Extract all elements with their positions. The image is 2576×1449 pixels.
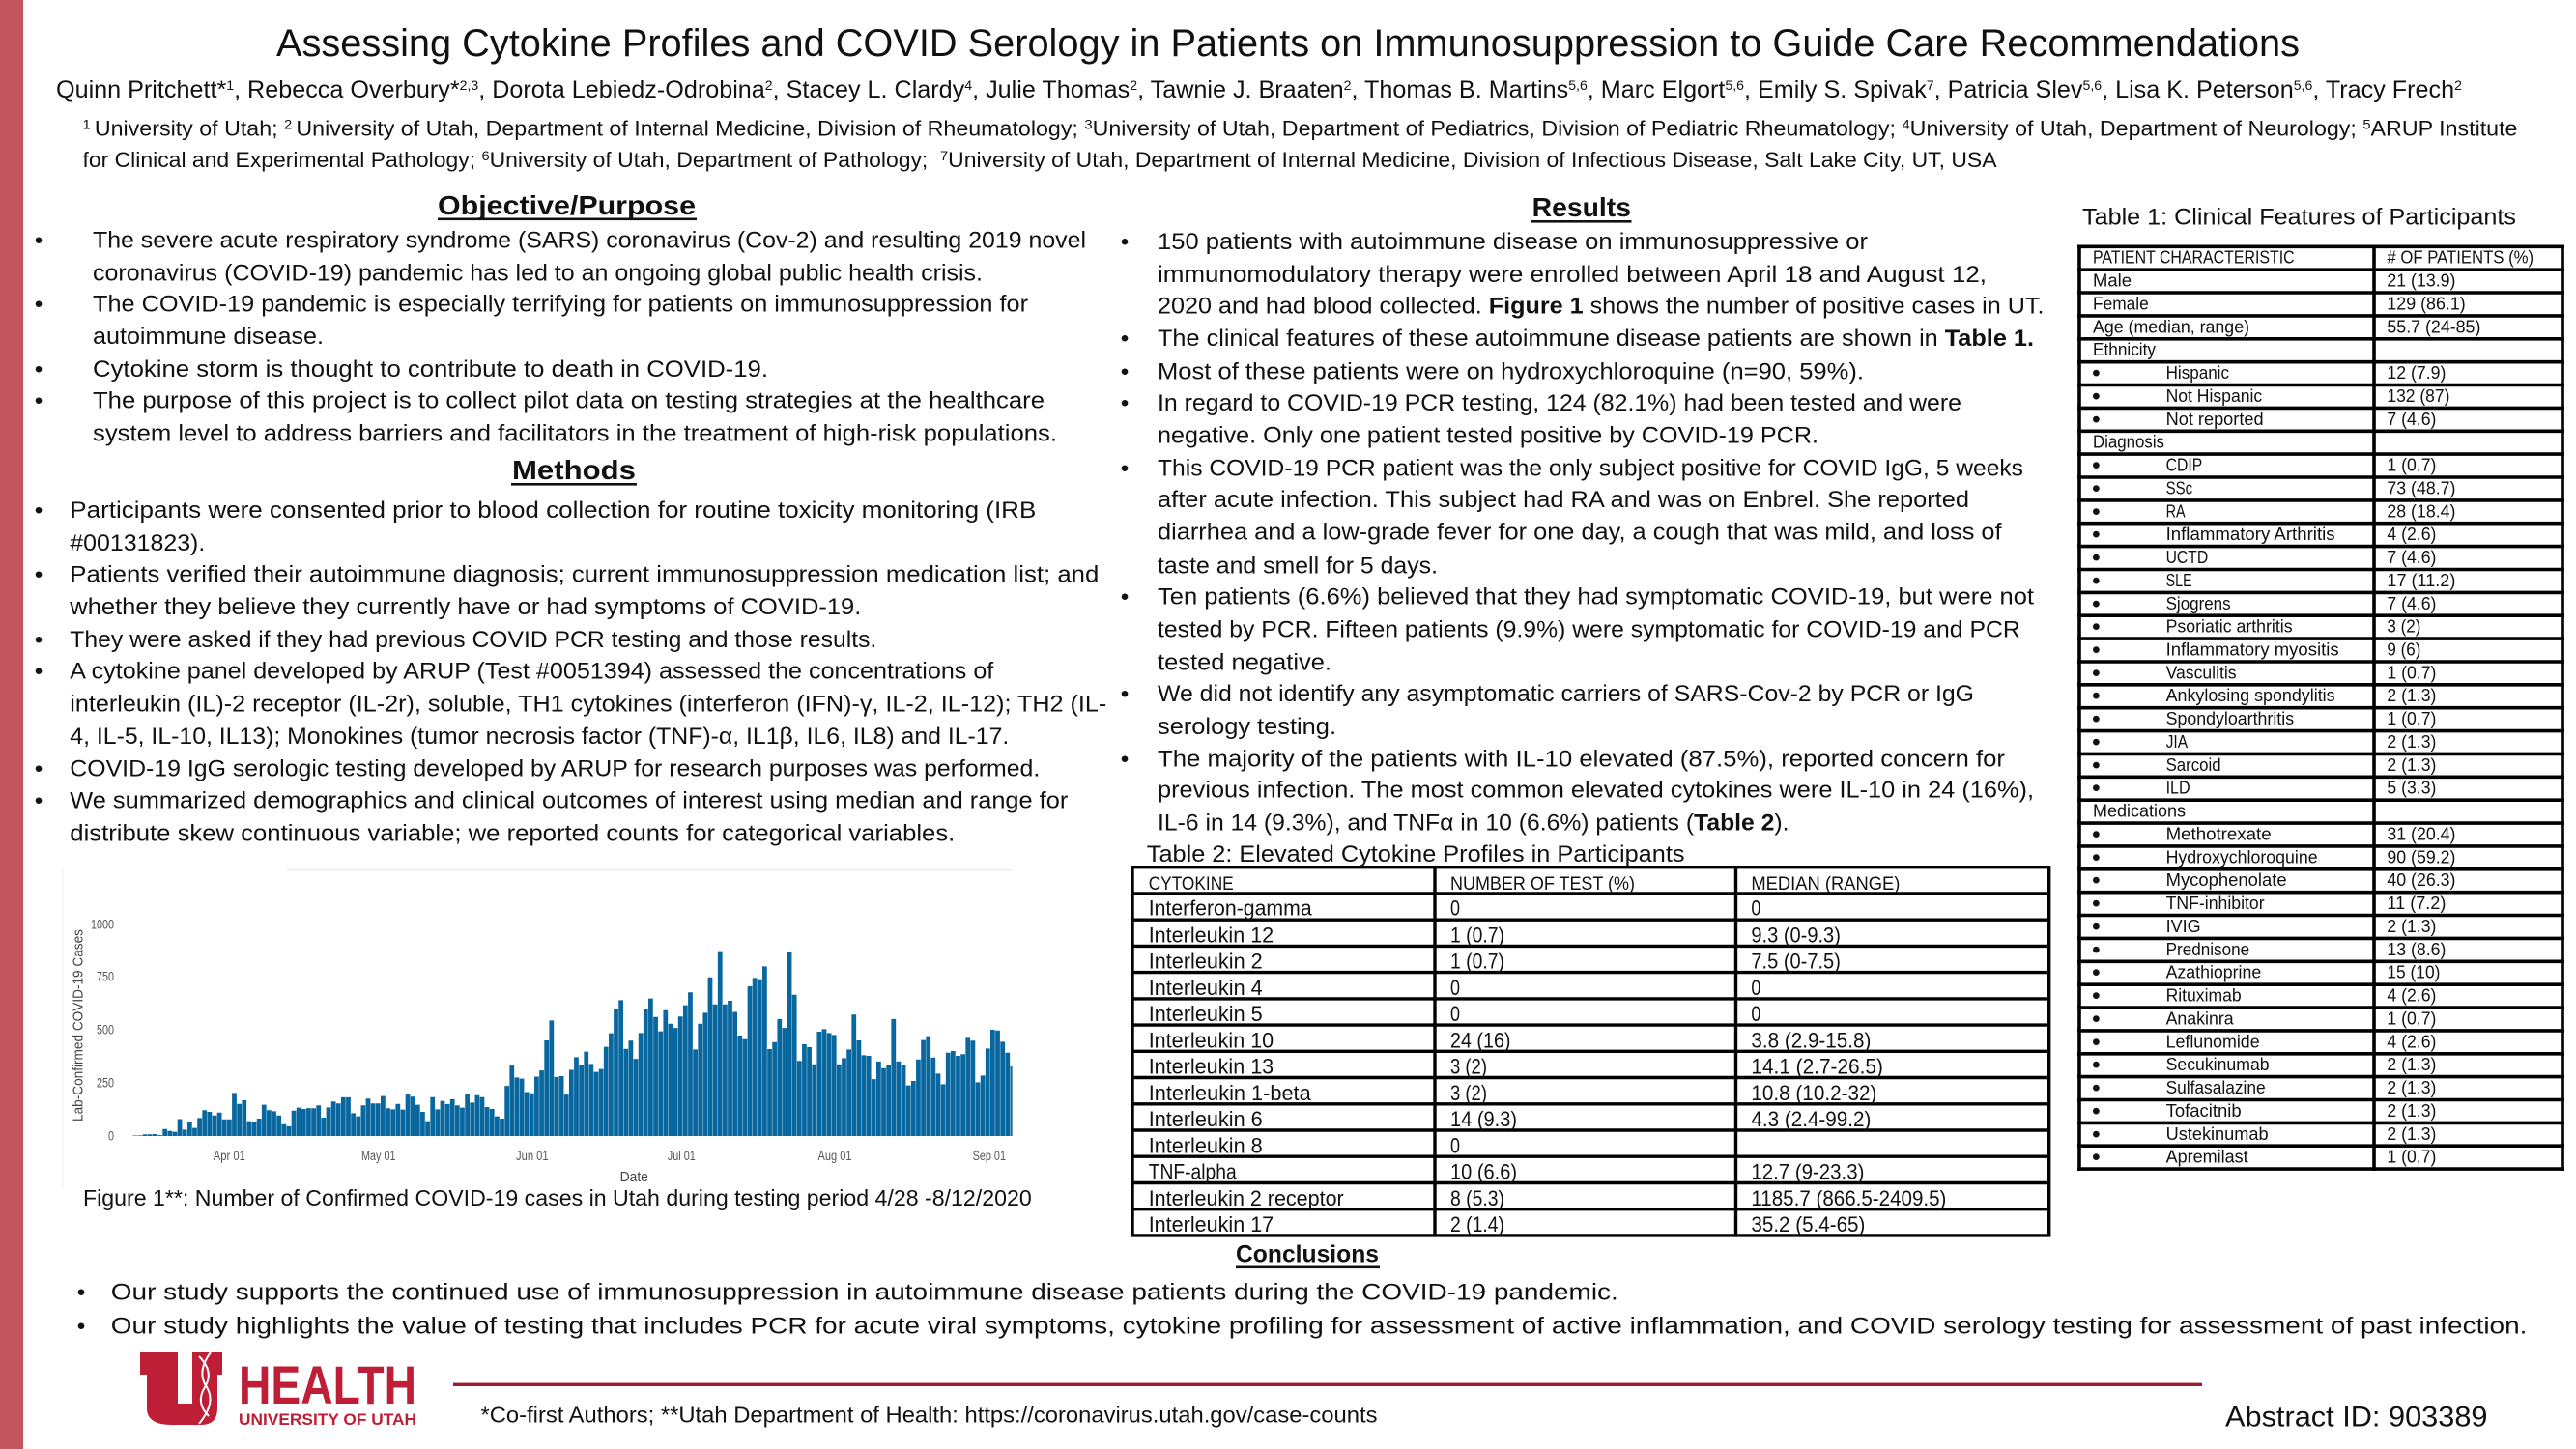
table 1 diagnosis rows: 9 (6): [2387, 639, 2420, 659]
results bullets: The clinical features of these autoimmune disease patients are shown in Table 1.: [1158, 326, 2034, 352]
table 1 medication rows: 4 (2.6): [2387, 1031, 2436, 1051]
table 1 diagnosis rows: •: [2092, 637, 2101, 664]
table 1 diagnosis rows: SLE: [2166, 570, 2192, 590]
table 2 rows: Interleukin 4: [1149, 976, 1263, 1000]
table 1 medication rows: •: [2092, 1074, 2101, 1101]
table 1 ethnicity rows: [2092, 339, 2449, 433]
affiliations: 1: [83, 117, 95, 132]
results bullets: In regard to COVID-19 PCR testing, 124 (82.1%) had been tested and were: [1158, 390, 1961, 416]
results bullets: tested negative.: [1158, 649, 1331, 675]
table 2 rows: 0: [1751, 1002, 1760, 1026]
table 2 rows: 0: [1450, 976, 1460, 1000]
affiliations: [83, 117, 2518, 172]
methods bullets: •: [35, 562, 43, 588]
table 1 diagnosis rows: •: [2092, 567, 2101, 594]
table 2 rows: 3 (2): [1450, 1081, 1487, 1105]
table 2 rows: 7.5 (0-7.5): [1751, 950, 1841, 974]
y axis labels: [91, 918, 114, 1144]
table 1 diagnosis rows: 2 (1.3): [2387, 754, 2436, 775]
results bullets: •: [1121, 746, 1129, 772]
results bullets: serology testing.: [1158, 714, 1336, 740]
results bullets: Most of these patients were on hydroxychloroquine (n=90, 59%).: [1158, 359, 1864, 385]
table 1 medication rows: Prednisone: [2166, 939, 2249, 959]
table 1 medication rows: •: [2092, 891, 2101, 918]
table 1 medication rows: 4 (2.6): [2387, 985, 2436, 1005]
authors: , Tawnie J. Braaten: [1137, 76, 1344, 103]
authors: , Emily S. Spivak: [1744, 76, 1927, 103]
results bullets: The majority of the patients with IL-10 elevated (87.5%), reported concern for: [1158, 746, 2005, 772]
results bullets: •: [1121, 229, 1129, 255]
table 1 ethnicity rows: 132 (87): [2387, 385, 2449, 406]
table 2 rows: 0: [1450, 1133, 1460, 1157]
objective bullets: The purpose of this project is to collect pilot data on testing strategies at the healthcare: [93, 388, 1045, 414]
panel: methods: [35, 455, 1106, 847]
y axis labels: 1000: [91, 918, 114, 931]
table 1 medication rows: Apremilast: [2166, 1147, 2248, 1167]
table 2 rows: 0: [1450, 1002, 1460, 1026]
logo wordmark: HEALTH: [239, 1354, 416, 1415]
table 2 rows: MEDIAN (RANGE): [1751, 874, 1900, 895]
table 1 diagnosis rows: 4 (2.6): [2387, 524, 2436, 544]
table 1 diagnosis rows: 7 (4.6): [2387, 547, 2436, 567]
conclusion bullets: •: [77, 1314, 85, 1339]
results bullets: 2020 and had blood collected. Figure 1 shows the number of positive cases in UT.: [1158, 293, 2045, 319]
conclusion bullets: Our study highlights the value of testing that includes PCR for acute viral symptoms, cytokine profiling for assessment of active inflammation, and COVID serology testing for assessment of past infection.: [111, 1314, 2527, 1339]
table 2 rows: Interleukin 17: [1149, 1212, 1274, 1236]
table 1 diagnosis rows: RA: [2166, 500, 2186, 521]
x axis labels: [214, 1149, 1006, 1163]
abstract id: Abstract ID: 903389: [2225, 1402, 2487, 1434]
panel: conclusions: [77, 1241, 2527, 1339]
objective bullets: autoimmune disease.: [93, 324, 324, 350]
table 2 rows: 0: [1450, 896, 1460, 920]
affiliations: 3: [1084, 117, 1093, 132]
table 2 rows: 9.3 (0-9.3): [1751, 923, 1841, 947]
table 1 diagnosis rows: Spondyloarthritis: [2166, 708, 2294, 728]
table 1 medication rows: 2 (1.3): [2387, 916, 2436, 936]
methods bullets: distribute skew continuous variable; we reported counts for categorical variables.: [70, 821, 955, 847]
table 2 rows: TNF-alpha: [1149, 1159, 1237, 1184]
affiliations: University of Utah;: [95, 117, 284, 141]
table 2 rows: Interleukin 8: [1149, 1133, 1263, 1157]
table 2 rows: 0: [1751, 976, 1760, 1000]
results bullets: [1121, 229, 2045, 836]
methods bullets: Participants were consented prior to blood collection for routine toxicity monitoring (IRB: [70, 497, 1036, 524]
table 1 diagnosis rows: •: [2092, 775, 2101, 802]
heading: methods: Methods: [512, 455, 636, 485]
table 2 rows: 8 (5.3): [1450, 1186, 1504, 1210]
table 1 diagnosis rows: •: [2092, 706, 2101, 733]
table 2 rows: 1 (0.7): [1450, 923, 1504, 947]
authors: Quinn Pritchett*: [56, 76, 225, 103]
table 2 rows: Interleukin 2: [1149, 950, 1263, 974]
table 1 medication rows: Tofacitnib: [2166, 1100, 2242, 1121]
table 1 diagnosis rows: •: [2092, 660, 2101, 687]
logo: University of Utah Health: [140, 1352, 416, 1429]
table 2 rows: 12.7 (9-23.3): [1751, 1159, 1864, 1184]
table 2 rows: 14 (9.3): [1450, 1107, 1517, 1131]
x axis labels: Jun 01: [516, 1149, 549, 1163]
results bullets: 150 patients with autoimmune disease on immunosuppressive or: [1158, 229, 1868, 255]
x axis labels: Sep 01: [973, 1149, 1006, 1163]
affiliations: University of Utah, Department of Internal Medicine, Division of Infectious Disease, Salt Lake City, UT, USA: [948, 148, 1997, 172]
table 1 medication rows: Methotrexate: [2166, 823, 2272, 844]
affiliations: 2: [284, 117, 296, 132]
authors: , Patricia Slev: [1934, 76, 2083, 103]
objective bullets: •: [35, 388, 43, 414]
table 2 rows: 10 (6.6): [1450, 1159, 1517, 1184]
table 1 medication rows: •: [2092, 913, 2101, 940]
table 1 ethnicity rows: 12 (7.9): [2387, 362, 2446, 383]
table 1 diagnosis rows: 28 (18.4): [2387, 500, 2455, 521]
table 1 medication rows: Hydroxychloroquine: [2166, 846, 2318, 867]
table 1 medication rows: IVIG: [2166, 916, 2201, 936]
table 2 rows: 0: [1751, 896, 1760, 920]
objective bullets: system level to address barriers and facilitators in the treatment of high-risk populations.: [93, 421, 1057, 447]
footnote: *Co-first Authors; **Utah Department of Health: https://coronavirus.utah.gov/case-counts: [481, 1403, 1378, 1428]
table 1 medication rows: •: [2092, 1052, 2101, 1079]
table 2 rows: 4.3 (2.4-99.2): [1751, 1107, 1871, 1131]
objective bullets: •: [35, 292, 43, 318]
methods bullets: Patients verified their autoimmune diagnosis; current immunosuppression medication list; and: [70, 562, 1099, 588]
methods bullets: •: [35, 659, 43, 685]
table 1 diagnosis rows: •: [2092, 752, 2101, 779]
authors: , Lisa K. Peterson: [2102, 76, 2294, 103]
authors: , Stacey L. Clardy: [773, 76, 965, 103]
table 1 ethnicity rows: •: [2092, 406, 2101, 433]
affiliations: 5: [2362, 117, 2371, 132]
table 1 diagnosis rows: 2 (1.3): [2387, 731, 2436, 752]
authors: 2: [1130, 77, 1137, 93]
left accent bar: [0, 0, 23, 1449]
table 1 diagnosis rows: •: [2092, 613, 2101, 640]
table 1 characteristic and demographic rows: PATIENT CHARACTERISTIC: [2093, 247, 2295, 268]
table 1 medication rows: Mycophenolate: [2166, 869, 2287, 890]
table 2 rows: 1 (0.7): [1450, 950, 1504, 974]
methods bullets: 4, IL-5, IL-10, IL13); Monokines (tumor necrosis factor (TNF)-α, IL1β, IL6, IL8) and IL-17.: [70, 724, 1009, 750]
table 1 ethnicity rows: •: [2092, 383, 2101, 410]
table 1 diagnosis rows: ILD: [2166, 778, 2190, 798]
table 2 rows: 3 (2): [1450, 1055, 1487, 1079]
table 1 medication rows: •: [2092, 1121, 2101, 1148]
authors: 2: [1344, 77, 1352, 93]
objective bullets: The severe acute respiratory syndrome (SARS) coronavirus (Cov-2) and resulting 2019 novel: [93, 228, 1086, 254]
table 2 rows: 3.8 (2.9-15.8): [1751, 1028, 1871, 1052]
table 1 medication rows: Secukinumab: [2166, 1054, 2270, 1074]
affiliations: University of Utah, Department of Neurology;: [1910, 117, 2362, 141]
table 2 rows: 1185.7 (866.5-2409.5): [1751, 1186, 1946, 1210]
table 2 rows: Interferon-gamma: [1149, 896, 1312, 920]
objective bullets: [35, 228, 1086, 447]
objective bullets: •: [35, 228, 43, 254]
table 2 rows: Interleukin 6: [1149, 1107, 1263, 1131]
table 1 diagnosis rows: 1 (0.7): [2387, 662, 2436, 682]
methods bullets: #00131823).: [70, 530, 205, 556]
table 1 diagnosis rows: Diagnosis: [2093, 432, 2164, 452]
table 2 rows: 35.2 (5.4-65): [1751, 1212, 1865, 1236]
y axis labels: 500: [97, 1022, 114, 1037]
table 1 medication rows: 31 (20.4): [2387, 823, 2455, 844]
affiliations: 7: [940, 148, 948, 163]
table 1 medication rows: 90 (59.2): [2387, 846, 2455, 867]
table 1 medication rows: Leflunomide: [2166, 1031, 2260, 1051]
table 1 characteristic and demographic rows: Age (median, range): [2093, 316, 2249, 336]
logo subtitle: UNIVERSITY OF UTAH: [239, 1410, 416, 1429]
table 1 diagnosis rows: •: [2092, 498, 2101, 526]
authors: 7: [1927, 77, 1934, 93]
y axis labels: 750: [97, 970, 114, 983]
authors: 2: [765, 77, 773, 93]
table 1 diagnosis rows: CDIP: [2166, 454, 2202, 475]
x axis title: Date: [620, 1170, 648, 1185]
table 1 medication rows: Ustekinumab: [2166, 1123, 2269, 1144]
table 1 medication rows: 11 (7.2): [2387, 893, 2446, 913]
table 1 medication rows: 2 (1.3): [2387, 1123, 2436, 1144]
table 1 ethnicity rows: Ethnicity: [2093, 339, 2157, 359]
table 1 characteristic and demographic rows: 55.7 (24-85): [2387, 316, 2480, 336]
results bullets: negative. Only one patient tested positive by COVID-19 PCR.: [1158, 422, 1818, 448]
table 1 medication rows: Sulfasalazine: [2166, 1077, 2266, 1097]
panel: results: [1121, 192, 2045, 836]
methods bullets: •: [35, 755, 43, 781]
table 1 diagnosis rows: Inflammatory myositis: [2166, 639, 2339, 659]
table 1 diagnosis rows: 17 (11.2): [2387, 570, 2455, 590]
results bullets: •: [1121, 390, 1129, 416]
bars: [135, 952, 1013, 1136]
table 1 characteristic and demographic rows: 21 (13.9): [2387, 270, 2455, 291]
table 1 ethnicity rows: •: [2092, 359, 2101, 386]
table 1 medication rows: •: [2092, 821, 2101, 848]
heading: results: Results: [1532, 192, 1631, 222]
authors: 5,6: [2083, 77, 2102, 93]
table 1 characteristic and demographic rows: 129 (86.1): [2387, 293, 2466, 313]
authors: 2,3: [460, 77, 478, 93]
table 1 ethnicity rows: 7 (4.6): [2387, 409, 2436, 429]
table 1 diagnosis rows: •: [2092, 545, 2101, 572]
table 1 medication rows: 2 (1.3): [2387, 1077, 2436, 1097]
methods bullets: A cytokine panel developed by ARUP (Test #0051394) assessed the concentrations of: [70, 659, 993, 685]
panel: objective/purpose: [35, 190, 1086, 447]
authors: 4: [964, 77, 972, 93]
table 1 diagnosis rows: UCTD: [2166, 547, 2208, 567]
methods bullets: •: [35, 627, 43, 653]
methods bullets: •: [35, 497, 43, 524]
table 2 rows: Interleukin 1-beta: [1149, 1081, 1311, 1105]
table 2 rows: 2 (1.4): [1450, 1212, 1504, 1236]
methods bullets: [35, 497, 1106, 847]
table 1 medication rows: 15 (10): [2387, 962, 2440, 982]
table 1 diagnosis rows: JIA: [2166, 731, 2189, 752]
results bullets: taste and smell for 5 days.: [1158, 553, 1438, 579]
table 1 medication rows: •: [2092, 936, 2101, 963]
table 1 diagnosis rows: •: [2092, 452, 2101, 479]
table 1 characteristic and demographic rows: # OF PATIENTS (%): [2387, 247, 2533, 268]
table 1 medication rows: Rituximab: [2166, 985, 2242, 1005]
authors: , Marc Elgort: [1588, 76, 1725, 103]
table 1 diagnosis rows: Sjogrens: [2166, 593, 2231, 613]
table 1 medication rows: •: [2092, 867, 2101, 895]
affiliations: University of Utah, Department of Pathology;: [490, 148, 940, 172]
affiliations: ARUP Institute: [2371, 117, 2518, 141]
figure caption: Figure 1**: Number of Confirmed COVID-19 cases in Utah during testing period 4/28 -8/12/2020: [83, 1185, 1032, 1210]
affiliations: 4: [1902, 117, 1910, 132]
x axis labels: Aug 01: [817, 1149, 852, 1163]
table 1 ethnicity rows: Not reported: [2166, 409, 2264, 429]
table 1 medication rows: Medications: [2093, 801, 2186, 821]
table 1 diagnosis rows: 2 (1.3): [2387, 685, 2436, 705]
table 2 rows: Interleukin 12: [1149, 923, 1274, 947]
results bullets: diarrhea and a low-grade fever for one day, a cough that was mild, and loss of: [1158, 520, 2002, 546]
authors: , Rebecca Overbury*: [234, 76, 460, 103]
table 1 diagnosis rows: SSc: [2166, 477, 2192, 497]
table 2 rows: [1149, 874, 1946, 1236]
conclusion bullets: •: [77, 1280, 85, 1306]
table 1 medication rows: •: [2092, 844, 2101, 871]
conclusion bullets: [77, 1280, 2527, 1339]
icon: block U with DNA strand: [140, 1352, 222, 1425]
table 1 medication rows: 13 (8.6): [2387, 939, 2446, 959]
table 1 diagnosis rows: Sarcoid: [2166, 754, 2221, 775]
table 1 diagnosis rows: •: [2092, 475, 2101, 502]
results bullets: •: [1121, 681, 1129, 707]
table 1 medication rows: •: [2092, 1097, 2101, 1124]
y axis labels: 0: [108, 1128, 114, 1144]
objective bullets: Cytokine storm is thought to contribute to death in COVID-19.: [93, 356, 768, 383]
authors: , Tracy Frech: [2312, 76, 2454, 103]
results bullets: IL-6 in 14 (9.3%), and TNFα in 10 (6.6%) patients (Table 2).: [1158, 810, 1789, 836]
table 1 diagnosis rows: 1 (0.7): [2387, 454, 2436, 475]
bar chart: confirmed COVID-19 cases in Utah: [62, 866, 1013, 1188]
table 1 diagnosis rows: 5 (3.3): [2387, 778, 2436, 798]
table 2 rows: Interleukin 5: [1149, 1002, 1263, 1026]
methods bullets: We summarized demographics and clinical outcomes of interest using median and range for: [70, 788, 1068, 814]
table 1 diagnosis rows: Inflammatory Arthritis: [2166, 524, 2335, 544]
results bullets: after acute infection. This subject had RA and was on Enbrel. She reported: [1158, 487, 1969, 513]
table 1 medication rows: [2092, 801, 2455, 1171]
table 1 diagnosis rows: 73 (48.7): [2387, 477, 2455, 497]
y axis labels: 250: [97, 1076, 114, 1090]
table 1: clinical features of participants: [2077, 204, 2564, 1171]
table 1 ethnicity rows: Hispanic: [2166, 362, 2229, 383]
x axis labels: May 01: [361, 1149, 396, 1163]
results bullets: This COVID-19 PCR patient was the only subject positive for COVID IgG, 5 weeks: [1158, 456, 2023, 482]
table 1 characteristic and demographic rows: Male: [2093, 270, 2132, 291]
table 1 medication rows: •: [2092, 1144, 2101, 1171]
authors: 5,6: [2294, 77, 2313, 93]
x axis labels: Jul 01: [668, 1149, 696, 1163]
authors: 1: [226, 77, 234, 93]
table 1 diagnosis rows: [2092, 432, 2455, 802]
authors: , Julie Thomas: [972, 76, 1130, 103]
table 1 medication rows: Azathioprine: [2166, 962, 2261, 982]
table 1 diagnosis rows: Ankylosing spondylitis: [2166, 685, 2335, 705]
table 1 characteristic and demographic rows: Female: [2093, 293, 2149, 313]
results bullets: •: [1121, 359, 1129, 385]
authors: , Dorota Lebiedz-Odrobina: [478, 76, 765, 103]
affiliations: University of Utah, Department of Internal Medicine, Division of Rheumatology;: [296, 117, 1084, 141]
y axis title: Lab-Confirmed COVID-19 Cases: [72, 929, 87, 1122]
table 2 rows: CYTOKINE: [1149, 874, 1234, 895]
table 2 rows: 10.8 (10.2-32): [1751, 1081, 1876, 1105]
table 1 diagnosis rows: •: [2092, 683, 2101, 710]
results bullets: •: [1121, 584, 1129, 611]
table 1 diagnosis rows: Psoriatic arthritis: [2166, 616, 2293, 637]
title: Assessing Cytokine Profiles and COVID Serology in Patients on Immunosuppression to Guide Care Recommendations: [276, 22, 2300, 65]
table 2 rows: Interleukin 2 receptor: [1149, 1186, 1344, 1210]
table 1 diagnosis rows: •: [2092, 728, 2101, 755]
authors: 5,6: [1568, 77, 1588, 93]
table 1 medication rows: 1 (0.7): [2387, 1008, 2436, 1028]
table 2 rows: Interleukin 13: [1149, 1055, 1274, 1079]
x axis labels: Apr 01: [214, 1149, 245, 1163]
table 2 title: Table 2: Elevated Cytokine Profiles in Participants: [1147, 841, 1685, 867]
methods bullets: They were asked if they had previous COVID PCR testing and those results.: [70, 627, 876, 653]
results bullets: Ten patients (6.6%) believed that they had symptomatic COVID-19, but were not: [1158, 584, 2034, 611]
methods bullets: COVID-19 IgG serologic testing developed by ARUP for research purposes was performed.: [70, 755, 1040, 781]
authors: 2: [2454, 77, 2462, 93]
objective bullets: The COVID-19 pandemic is especially terrifying for patients on immunosuppression for: [93, 292, 1028, 318]
methods bullets: •: [35, 788, 43, 814]
affiliations: University of Utah, Department of Pediatrics, Division of Pediatric Rheumatology;: [1093, 117, 1902, 141]
results bullets: immunomodulatory therapy were enrolled between April 18 and August 12,: [1158, 262, 1987, 288]
results bullets: We did not identify any asymptomatic carriers of SARS-Cov-2 by PCR or IgG: [1158, 681, 1974, 707]
table 2 rows: 24 (16): [1450, 1028, 1511, 1052]
objective bullets: coronavirus (COVID-19) pandemic has led to an ongoing global public health crisis.: [93, 261, 983, 287]
methods bullets: whether they believe they currently have or had symptoms of COVID-19.: [69, 594, 861, 620]
results bullets: •: [1121, 326, 1129, 352]
table 1 medication rows: •: [2092, 959, 2101, 986]
heading: conclusions: Conclusions: [1236, 1241, 1379, 1268]
results bullets: previous infection. The most common elevated cytokines were IL-10 in 24 (16%),: [1158, 778, 2034, 804]
table 1 ethnicity rows: Not Hispanic: [2166, 385, 2262, 406]
table 2 rows: NUMBER OF TEST (%): [1450, 874, 1635, 895]
table 1 medication rows: TNF-inhibitor: [2166, 893, 2265, 913]
table 1 diagnosis rows: 1 (0.7): [2387, 708, 2436, 728]
table 1 medication rows: •: [2092, 1006, 2101, 1033]
table 1 diagnosis rows: 7 (4.6): [2387, 593, 2436, 613]
table 1 medication rows: 2 (1.3): [2387, 1100, 2436, 1121]
table 1 diagnosis rows: 3 (2): [2387, 616, 2420, 637]
table 1 diagnosis rows: Vasculitis: [2166, 662, 2237, 682]
table 1 diagnosis rows: •: [2092, 590, 2101, 617]
authors: 5,6: [1725, 77, 1744, 93]
table 1 medication rows: 1 (0.7): [2387, 1147, 2436, 1167]
table 2 rows: Interleukin 10: [1149, 1028, 1274, 1052]
table 1 medication rows: •: [2092, 1029, 2101, 1056]
table 1 diagnosis rows: •: [2092, 522, 2101, 549]
results bullets: •: [1121, 456, 1129, 482]
table 1 medication rows: 2 (1.3): [2387, 1054, 2436, 1074]
table 1 medication rows: Anakinra: [2166, 1008, 2234, 1028]
affiliations: for Clinical and Experimental Pathology;: [83, 148, 460, 172]
table 1 medication rows: 40 (26.3): [2387, 869, 2455, 890]
heading: objective/purpose: Objective/Purpose: [438, 190, 696, 220]
table 1 medication rows: •: [2092, 982, 2101, 1009]
authors: , Thomas B. Martins: [1352, 76, 1568, 103]
table 2 rows: 14.1 (2.7-26.5): [1751, 1055, 1883, 1079]
affiliations: 6: [481, 148, 490, 163]
conclusion bullets: Our study supports the continued use of immunosuppression in autoimmune disease patients during the COVID-19 pandemic.: [111, 1280, 1618, 1306]
table 1 characteristic and demographic rows: [2093, 247, 2533, 336]
objective bullets: •: [35, 356, 43, 383]
results bullets: tested by PCR. Fifteen patients (9.9%) were symptomatic for COVID-19 and PCR: [1158, 616, 2020, 642]
table 1 title: Table 1: Clinical Features of Participants: [2082, 204, 2516, 230]
table 2: elevated cytokine profiles: [1131, 841, 2050, 1237]
methods bullets: interleukin (IL)-2 receptor (IL-2r), soluble, TH1 cytokines (interferon (IFN)-γ, IL-2, IL-12); TH2 (IL-: [70, 692, 1106, 718]
